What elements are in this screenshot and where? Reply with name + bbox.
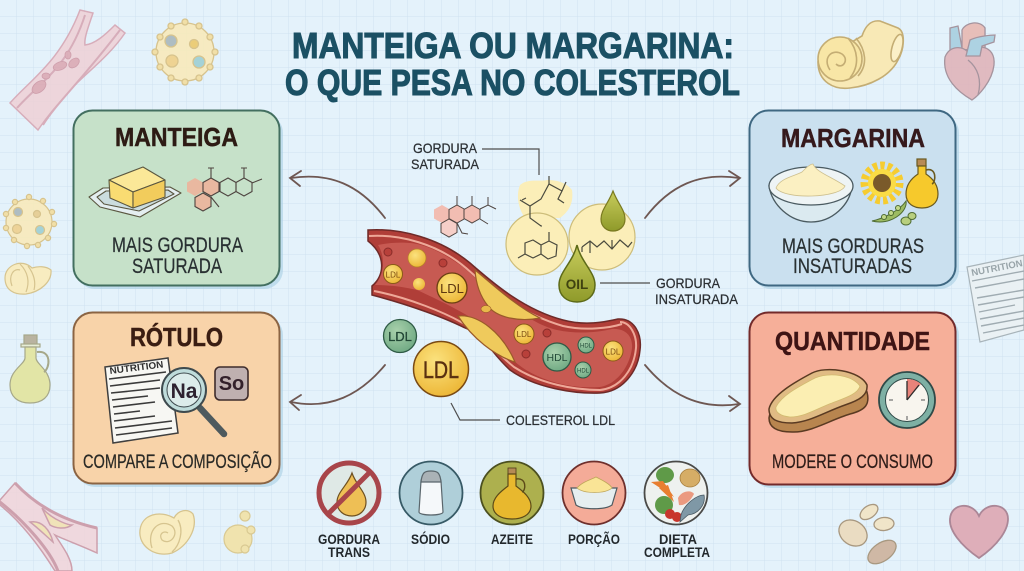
icon: magnifying glass — [162, 368, 224, 434]
arrow: to manteiga — [290, 171, 385, 218]
icon: clock — [879, 372, 935, 428]
label: porcao: PORÇÃO — [568, 532, 620, 547]
icon: steroid molecule — [434, 196, 496, 237]
text: mais gordura saturada: MAIS GORDURA — [112, 234, 243, 257]
title — [285, 25, 740, 103]
heading: manteiga: MANTEIGA — [115, 122, 238, 152]
text: mais gorduras insaturadas: INSATURADAS — [793, 255, 912, 278]
text: mais gorduras insaturadas — [782, 235, 924, 278]
hdl particle small: HDL — [580, 344, 593, 350]
icon: bowl of margarine — [769, 164, 853, 222]
decoration: butter shell bottom — [140, 511, 194, 554]
red blood cells — [384, 248, 551, 358]
panel: rotulo — [74, 312, 283, 487]
arrow: to margarina — [645, 171, 740, 218]
decoration: nutrition label right: NUTRITION — [970, 258, 1024, 279]
decoration: blood vessel top left — [10, 10, 125, 130]
decoration: lipoprotein particle top — [152, 19, 218, 85]
heading: rotulo: RÓTULO — [130, 322, 223, 352]
heading: quantidade: QUANTIDADE — [775, 326, 930, 356]
text: compare a composicao: COMPARE A COMPOSIÇÃO — [83, 451, 272, 473]
arrow: to rotulo — [290, 365, 385, 410]
plaque upper — [475, 270, 540, 320]
label: gordura saturada — [411, 140, 539, 175]
icon: porcao — [562, 462, 626, 524]
icon: peas — [872, 201, 916, 225]
decoration: blood vessel bottom left — [0, 483, 97, 571]
icon: oil drop: OIL — [566, 277, 588, 292]
decoration: butter curl left — [5, 263, 51, 294]
icon: oil drop — [559, 245, 595, 302]
label: gordura trans: TRANS — [328, 545, 370, 560]
heading: margarina: MARGARINA — [781, 123, 925, 153]
label: gordura insaturada: GORDURA — [656, 275, 721, 291]
panel: quantidade — [750, 312, 959, 488]
text: mais gordura saturada — [112, 234, 243, 278]
label: colesterol ldl: COLESTEROL LDL — [506, 412, 615, 428]
decoration: nutrition label right — [967, 255, 1024, 342]
decoration: oil bottle left — [10, 335, 50, 403]
arrow: to quantidade — [645, 365, 740, 411]
fat particle — [408, 249, 426, 267]
decoration: nuts — [834, 501, 900, 569]
ldl particle — [514, 324, 534, 344]
ldl particle: LDL — [386, 270, 401, 280]
hdl particle — [543, 343, 571, 371]
icon: azeite — [480, 462, 544, 524]
decoration: anatomical heart — [945, 23, 995, 100]
icon: oil drop small — [601, 191, 625, 231]
label: colesterol ldl — [451, 403, 615, 428]
label: dieta completa: COMPLETA — [644, 545, 710, 560]
plaque fragment — [481, 306, 491, 312]
hdl particle: HDL — [546, 352, 568, 364]
icon: butter on plate — [89, 167, 181, 217]
text: modere o consumo: MODERE O CONSUMO — [772, 452, 933, 473]
icon: fat molecule blobs — [506, 176, 635, 275]
ldl particle medium — [437, 273, 467, 303]
hdl particle small — [575, 362, 591, 378]
label: gordura saturada: SATURADA — [411, 156, 480, 172]
text: mais gorduras insaturadas: MAIS GORDURAS — [782, 235, 924, 258]
label: gordura trans: GORDURA — [318, 532, 380, 547]
icon: so tile — [215, 367, 248, 400]
icon: saturated fat molecule — [187, 168, 262, 211]
icon: nutrition label — [105, 358, 178, 443]
ldl particle: LDL — [606, 348, 621, 356]
decoration: lipoprotein particle left — [3, 194, 57, 249]
icon: sunflower — [866, 167, 898, 199]
icon: toast with butter — [769, 370, 868, 432]
label: gordura saturada: GORDURA — [413, 140, 478, 156]
title: O QUE PESA NO COLESTEROL — [285, 62, 740, 103]
artery with plaque — [368, 230, 640, 393]
plaque lower — [458, 316, 515, 362]
ldl particle medium: LDL — [440, 281, 464, 296]
fat particle small — [413, 278, 425, 290]
icon: dieta completa — [644, 462, 708, 524]
icon: gordura trans — [319, 463, 379, 523]
hdl particle small — [578, 337, 594, 353]
title: MANTEIGA OU MARGARINA: — [292, 25, 734, 66]
icon: oil bottle — [906, 159, 938, 208]
label: dieta completa: DIETA — [659, 532, 697, 547]
label: dieta completa — [644, 532, 710, 560]
ldl particle large: LDL — [423, 357, 459, 384]
icon: so tile: So — [219, 373, 244, 395]
decoration: heart bottom right — [950, 506, 1008, 558]
decoration: fat blob bottom — [224, 511, 255, 553]
text: mais gordura saturada: SATURADA — [132, 255, 222, 278]
label: gordura insaturada: INSATURADA — [655, 291, 739, 307]
ldl particle — [384, 264, 402, 284]
label: gordura trans — [318, 532, 380, 560]
hdl particle small: HDL — [577, 368, 590, 374]
ldl particle green: LDL — [388, 329, 412, 344]
icon: magnifying glass: Na — [171, 380, 198, 403]
icon: sodio — [400, 462, 462, 524]
ldl particle green — [384, 320, 416, 352]
label: azeite: AZEITE — [491, 532, 533, 547]
panel: manteiga — [74, 110, 283, 289]
label: sodio: SÓDIO — [411, 532, 450, 547]
decoration: butter curl top right — [818, 21, 905, 88]
label: gordura insaturada — [600, 275, 739, 307]
panel: margarina — [750, 110, 959, 289]
ldl particle: LDL — [517, 330, 532, 339]
ldl particle — [603, 341, 623, 361]
ldl particle large — [414, 342, 468, 396]
icon: nutrition label: NUTRITION — [109, 359, 164, 377]
